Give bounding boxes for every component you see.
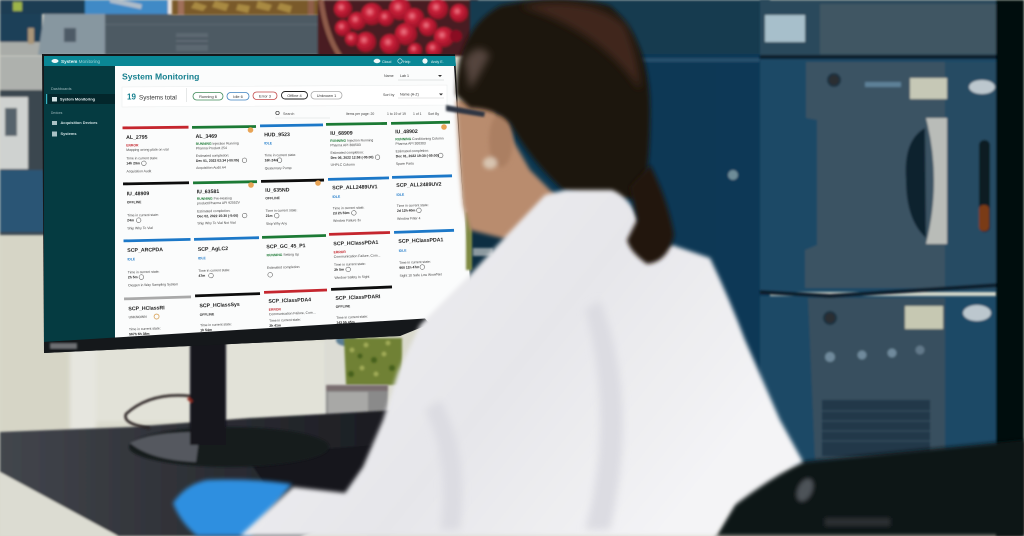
filter panel: Running 6 bbox=[199, 94, 217, 99]
card: SCP_HClassSys: SCP_HClassSys bbox=[199, 302, 240, 309]
card: IU_63581: product/Pharma API 92552V bbox=[197, 201, 241, 205]
search and pagination: Sort By bbox=[428, 112, 439, 116]
card: HUD_9523: 16h 24m bbox=[265, 158, 278, 162]
card: IU_48909: 24m bbox=[127, 218, 134, 222]
card: IU_63581: Estimated completion: bbox=[197, 209, 231, 213]
card: SCP_ARCPDA bbox=[124, 238, 192, 287]
app logo and name: System Monitoring bbox=[61, 59, 101, 64]
card: HUD_9523: HUD_9523 bbox=[264, 132, 290, 138]
card: IU_48902: IU_48902 bbox=[395, 129, 418, 135]
card: SCP_HClassPDA1 idle bbox=[394, 229, 456, 278]
background: shelf equipment top left bbox=[0, 0, 325, 56]
card: IU_48909: Time in current state: bbox=[127, 213, 159, 217]
card: SCP_HClassRI bbox=[124, 296, 192, 336]
sidebar navigation: Devices bbox=[51, 111, 63, 115]
desk bbox=[0, 410, 400, 536]
background: cabinets behind monitor bbox=[0, 230, 364, 435]
card: AL_2795: ERROR bbox=[126, 143, 139, 147]
filter panel: Systems total bbox=[139, 94, 177, 102]
card: SCP_ALL2489UV1: Window Failure 3x bbox=[333, 218, 361, 223]
background: bowl of red berries bbox=[318, 0, 478, 57]
card: SCP_HClassRI: Time in current state: bbox=[129, 326, 161, 331]
card: SCP_HClassPDA1 idle: Time in current state: bbox=[399, 260, 431, 265]
card: IU_48902: Spare Parts bbox=[396, 162, 414, 166]
sidebar navigation: Systems bbox=[60, 131, 77, 136]
monitor bbox=[42, 54, 470, 353]
background: green plant and cup bbox=[325, 334, 402, 447]
card: IU_63581: IU_63581 bbox=[197, 189, 219, 195]
card: AL_3469: RUNNING Injection Running bbox=[196, 141, 239, 146]
card: AL_3469: Acquisition Audit A4 bbox=[196, 166, 226, 170]
card: IU_63581: RUNNING Pre-Heating bbox=[197, 196, 232, 201]
monitor screen background bbox=[115, 66, 470, 339]
card: SCP_ALL2489UV1: 2d 2h 50m bbox=[333, 211, 350, 215]
filter panel: Idle 6 bbox=[233, 94, 243, 99]
system status cards bbox=[122, 121, 456, 336]
card: SCP_ARCPDA: Time in current state: bbox=[128, 270, 160, 274]
filter panel: Offline 4 bbox=[287, 93, 303, 98]
card: IU_635ND: 21m bbox=[266, 214, 273, 218]
card: IU_48902 bbox=[391, 121, 451, 166]
card: SCP_ALL2489UV2: 2d 12h 40m bbox=[397, 208, 415, 213]
card: SCP_HClassPDA1 error: Time in current state: bbox=[334, 262, 366, 267]
app header bar: Andy E. bbox=[431, 60, 444, 64]
glasses bbox=[446, 105, 485, 117]
card: SCP_IClassPDA4: Time in current state: bbox=[269, 318, 301, 323]
filter panel: Unknown 1 bbox=[317, 93, 336, 98]
monitor bezel logo bbox=[50, 343, 77, 349]
monitor stand and base bbox=[126, 340, 329, 467]
card: IU_48902: Dec 01, 2022 19:30 (-05:00) bbox=[396, 154, 439, 158]
instrument: middle module with door handle bbox=[760, 58, 1005, 292]
hair crown brown tint bbox=[520, 3, 640, 90]
card: IU_68909 bbox=[326, 122, 388, 167]
card: IU_48902: RUNNING Conditioning Column bbox=[395, 136, 444, 141]
instrument: lower module with vent bbox=[760, 296, 1000, 466]
card: HUD_9523: Quaternary Pump bbox=[265, 166, 292, 170]
card: IU_68909: IU_68909 bbox=[330, 131, 353, 137]
card: AL_2795: Acquisition Audit bbox=[126, 169, 151, 173]
card: SCP_ALL2489UV2: IDLE bbox=[396, 193, 405, 197]
card: SCP_GC_45_P1: SCP_GC_45_P1 bbox=[266, 243, 306, 250]
sidebar navigation: System Monitoring bbox=[60, 96, 96, 102]
card: SCP_AgLC2 bbox=[194, 236, 260, 278]
card: SCP_IClassPDA4: Communication Failure, Com... bbox=[269, 311, 316, 316]
card: SCP_HClassPDA1 idle: 960 11h 47m bbox=[399, 265, 419, 270]
card: IU_63581: Ship Why To Vial Not Vial bbox=[197, 221, 236, 225]
instrument: top module bbox=[760, 0, 1005, 56]
user badges on cards bbox=[248, 124, 447, 188]
filter panel: Name (A-Z) bbox=[400, 92, 419, 96]
ponytail bbox=[627, 165, 674, 264]
filter panel: Sort by bbox=[383, 93, 395, 97]
card: SCP_IClassPDARI: OFFLINE bbox=[336, 304, 351, 309]
card: SCP_ALL2489UV1: Time in current state: bbox=[333, 206, 365, 210]
card: SCP_HClassPDA1 error: Communication Failure, Com... bbox=[334, 253, 381, 259]
background: navy instrument behind the scientist bbox=[470, 0, 770, 480]
card: SCP_ALL2489UV2 bbox=[392, 174, 453, 221]
card: SCP_IClassPDA4 bbox=[264, 289, 328, 328]
card: SCP_IClassPDARI: SCP_IClassPDARI bbox=[335, 294, 381, 302]
filter panel bbox=[122, 74, 447, 107]
card: IU_635ND: Ship Why Any bbox=[266, 221, 287, 226]
face and neck bbox=[456, 100, 560, 240]
card: IU_635ND bbox=[261, 179, 325, 226]
card: SCP_ARCPDA: SCP_ARCPDA bbox=[127, 247, 163, 254]
card: IU_68909: RUNNING Injection Running bbox=[330, 138, 373, 143]
card: SCP_ARCPDA: Oxygen in Way Sampling System bbox=[128, 282, 178, 287]
card: SCP_ALL2489UV1: SCP_ALL2489UV1 bbox=[332, 184, 378, 191]
scientist bbox=[173, 0, 803, 536]
search and pagination: Items per page: 20 bbox=[346, 112, 374, 116]
card: IU_48909: IU_48909 bbox=[127, 191, 149, 197]
card: IU_635ND: IU_635ND bbox=[265, 187, 290, 194]
card: IU_635ND: OFFLINE bbox=[265, 196, 281, 200]
card: SCP_HClassSys: 1h 54m bbox=[200, 328, 212, 332]
card: SCP_HClassRI: UNKNOWN bbox=[129, 315, 147, 319]
card: SCP_HClassSys: Time in current state: bbox=[200, 322, 232, 327]
card: AL_2795: 14h 29m bbox=[126, 161, 140, 165]
card: SCP_AgLC2: 47m bbox=[198, 274, 205, 278]
filter panel: Error 3 bbox=[259, 93, 271, 98]
app header bar: Help bbox=[403, 60, 410, 64]
card: SCP_ARCPDA: IDLE bbox=[127, 257, 136, 261]
card: IU_68909: Dec 06, 2022 12:58 (-05:00) bbox=[331, 155, 374, 160]
card: AL_3469: Pharma Product 254 bbox=[196, 146, 227, 150]
filter panel: Name bbox=[384, 74, 394, 78]
card: SCP_ALL2489UV1: IDLE bbox=[332, 195, 341, 199]
card: AL_3469: AL_3469 bbox=[196, 134, 217, 140]
coat shadow folds bbox=[425, 300, 623, 530]
card: AL_3469 bbox=[192, 125, 257, 170]
card: SCP_AgLC2: IDLE bbox=[198, 256, 207, 260]
card: SCP_IClassPDARI: Time in current state: bbox=[336, 315, 368, 320]
card: IU_63581 bbox=[193, 180, 258, 225]
hair highlight bbox=[464, 49, 490, 90]
blue glove bbox=[173, 480, 292, 536]
card: SCP_ALL2489UV2: SCP_ALL2489UV2 bbox=[396, 182, 442, 189]
background: jar of spices bbox=[172, 0, 322, 15]
search and pagination: Search bbox=[283, 112, 294, 116]
page title: System Monitoring bbox=[122, 72, 199, 82]
background: instrument left of monitor bbox=[0, 56, 46, 235]
card: IU_48909: Ship Why To Vial bbox=[127, 226, 153, 230]
card: SCP_GC_45_P1: RUNNING Setting Up bbox=[267, 252, 299, 257]
card: SCP_GC_45_P1: Estimated completion: bbox=[267, 265, 300, 270]
monitor bezel bbox=[42, 54, 465, 353]
card: SCP_HClassRI: 567h 6h 38m bbox=[129, 332, 150, 336]
card: SCP_HClassPDA1 idle: Sight 10 Safe Low Wow/Net bbox=[399, 272, 442, 278]
card: SCP_HClassPDA1 idle: SCP_HClassPDA1 bbox=[398, 237, 444, 245]
card: HUD_9523: IDLE bbox=[264, 141, 273, 145]
card: HUD_9523 bbox=[260, 124, 324, 170]
plant strip seen past the monitor edge bbox=[466, 212, 493, 270]
card: SCP_HClassPDA1 error: 2h 5m bbox=[334, 268, 344, 272]
search and pagination: 1 of 1 bbox=[413, 112, 422, 116]
card: SCP_IClassPDA4: SCP_IClassPDA4 bbox=[268, 297, 311, 305]
chair back bbox=[715, 440, 1024, 536]
card: IU_68909: UHPLC Column bbox=[331, 163, 355, 167]
card: AL_2795: Mapping wrong plate on vial bbox=[126, 148, 169, 152]
card: SCP_IClassPDA4: ERROR bbox=[269, 307, 282, 312]
card: SCP_IClassPDARI: 143 5h 45m bbox=[336, 320, 355, 325]
card: AL_2795: Time in current state: bbox=[126, 156, 158, 160]
filter panel: Lab 1 bbox=[400, 74, 409, 78]
card: AL_3469: Dec 01, 2022 02:34 (-00:05) bbox=[196, 158, 239, 163]
card: AL_3469: Estimated completion: bbox=[196, 153, 229, 158]
card: SCP_HClassPDA1 error: ERROR bbox=[334, 250, 346, 254]
card: SCP_ALL2489UV1 bbox=[328, 177, 390, 223]
card: IU_48902: Pharma API 300303 bbox=[395, 141, 426, 146]
header menu: Cloud bbox=[382, 60, 391, 64]
card: SCP_ALL2489UV2: Window Filter 4 bbox=[397, 216, 421, 221]
card: SCP_IClassPDA4: 2h 41m bbox=[269, 323, 281, 328]
sidebar navigation: Dashboards bbox=[51, 87, 72, 91]
card: SCP_HClassSys: OFFLINE bbox=[200, 312, 215, 317]
card: SCP_HClassPDA1 idle: IDLE bbox=[399, 249, 407, 253]
monitor lower bezel bbox=[44, 318, 430, 353]
card: IU_635ND: Time in current state: bbox=[266, 208, 297, 213]
filter panel: 19 bbox=[127, 92, 136, 102]
white lab coat bbox=[240, 190, 803, 536]
card: SCP_HClassRI: SCP_HClassRI bbox=[128, 305, 165, 312]
card: SCP_AgLC2: SCP_AgLC2 bbox=[198, 246, 228, 253]
card: SCP_HClassPDA1 error: Window Safety In Sight bbox=[334, 275, 370, 280]
card: IU_63581: Dec 02, 2022 15:30 (-5:00) bbox=[197, 214, 238, 218]
card: IU_48909: OFFLINE bbox=[127, 200, 142, 204]
search and pagination bbox=[275, 111, 439, 118]
ear and earring bbox=[483, 113, 513, 169]
card: IU_48909 bbox=[123, 181, 190, 230]
card: SCP_ALL2489UV2: Time in current state: bbox=[397, 203, 429, 208]
card: AL_2795: AL_2795 bbox=[126, 135, 148, 141]
card: SCP_GC_45_P1 bbox=[262, 234, 327, 277]
hair bbox=[456, 0, 650, 200]
search and pagination: 1 to 19 of 19 bbox=[387, 112, 406, 116]
card: HUD_9523: Time in current state: bbox=[264, 153, 296, 157]
card: IU_68909: Pharma API 300503 bbox=[330, 143, 361, 147]
card: SCP_HClassPDA1 error: SCP_HClassPDA1 bbox=[333, 240, 379, 247]
card: IU_68909: Estimated completion: bbox=[330, 150, 364, 155]
app header bar bbox=[44, 56, 456, 66]
card: SCP_IClassPDARI bbox=[331, 286, 393, 325]
sidebar navigation bbox=[44, 66, 115, 342]
card: SCP_HClassSys bbox=[195, 292, 261, 332]
card: SCP_ARCPDA: 2h 5m bbox=[128, 275, 138, 279]
instrument stack on the right bbox=[760, 0, 1024, 536]
header icons bbox=[52, 58, 428, 64]
card: IU_48902: Estimated completion: bbox=[396, 149, 429, 153]
card: AL_2795 bbox=[122, 126, 189, 173]
card: SCP_HClassPDA1 error bbox=[329, 231, 391, 280]
card: SCP_AgLC2: Time in current state: bbox=[198, 268, 230, 273]
sidebar navigation: Acquisition Devices bbox=[60, 120, 97, 125]
